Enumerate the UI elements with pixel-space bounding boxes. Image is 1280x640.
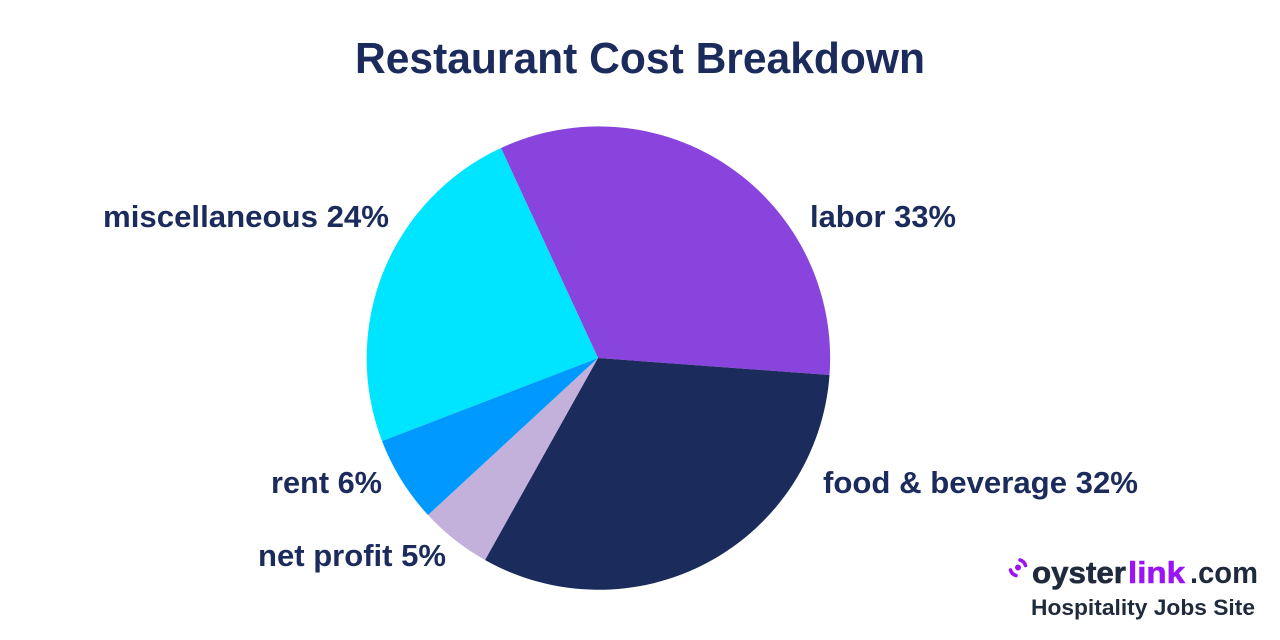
slice: miscellaneous 24% [367, 148, 598, 441]
slice: food and beverage 32% [485, 358, 830, 590]
label: labor: labor 33% [810, 199, 956, 234]
label: rent: rent 6% [271, 465, 382, 500]
logo: oysterlink [1010, 555, 1258, 620]
slice: net profit 5% [428, 358, 598, 560]
title: Restaurant Cost Breakdown [355, 34, 925, 83]
wordmark [1032, 555, 1258, 590]
wordmark: .com: .com [1190, 555, 1258, 590]
icon: oyster signal [1010, 560, 1026, 576]
label: miscellaneous: miscellaneous 24% [103, 199, 389, 234]
wordmark: link: link [1128, 555, 1186, 590]
label: net profit: net profit 5% [258, 538, 446, 573]
pie chart [367, 126, 830, 590]
slice: labor 33% [501, 126, 830, 375]
wordmark: oyster: oyster [1032, 555, 1126, 590]
tagline: Hospitality Jobs Site [1031, 595, 1255, 620]
label: food and beverage: food & beverage 32% [823, 465, 1138, 500]
slice: rent 6% [382, 358, 598, 515]
